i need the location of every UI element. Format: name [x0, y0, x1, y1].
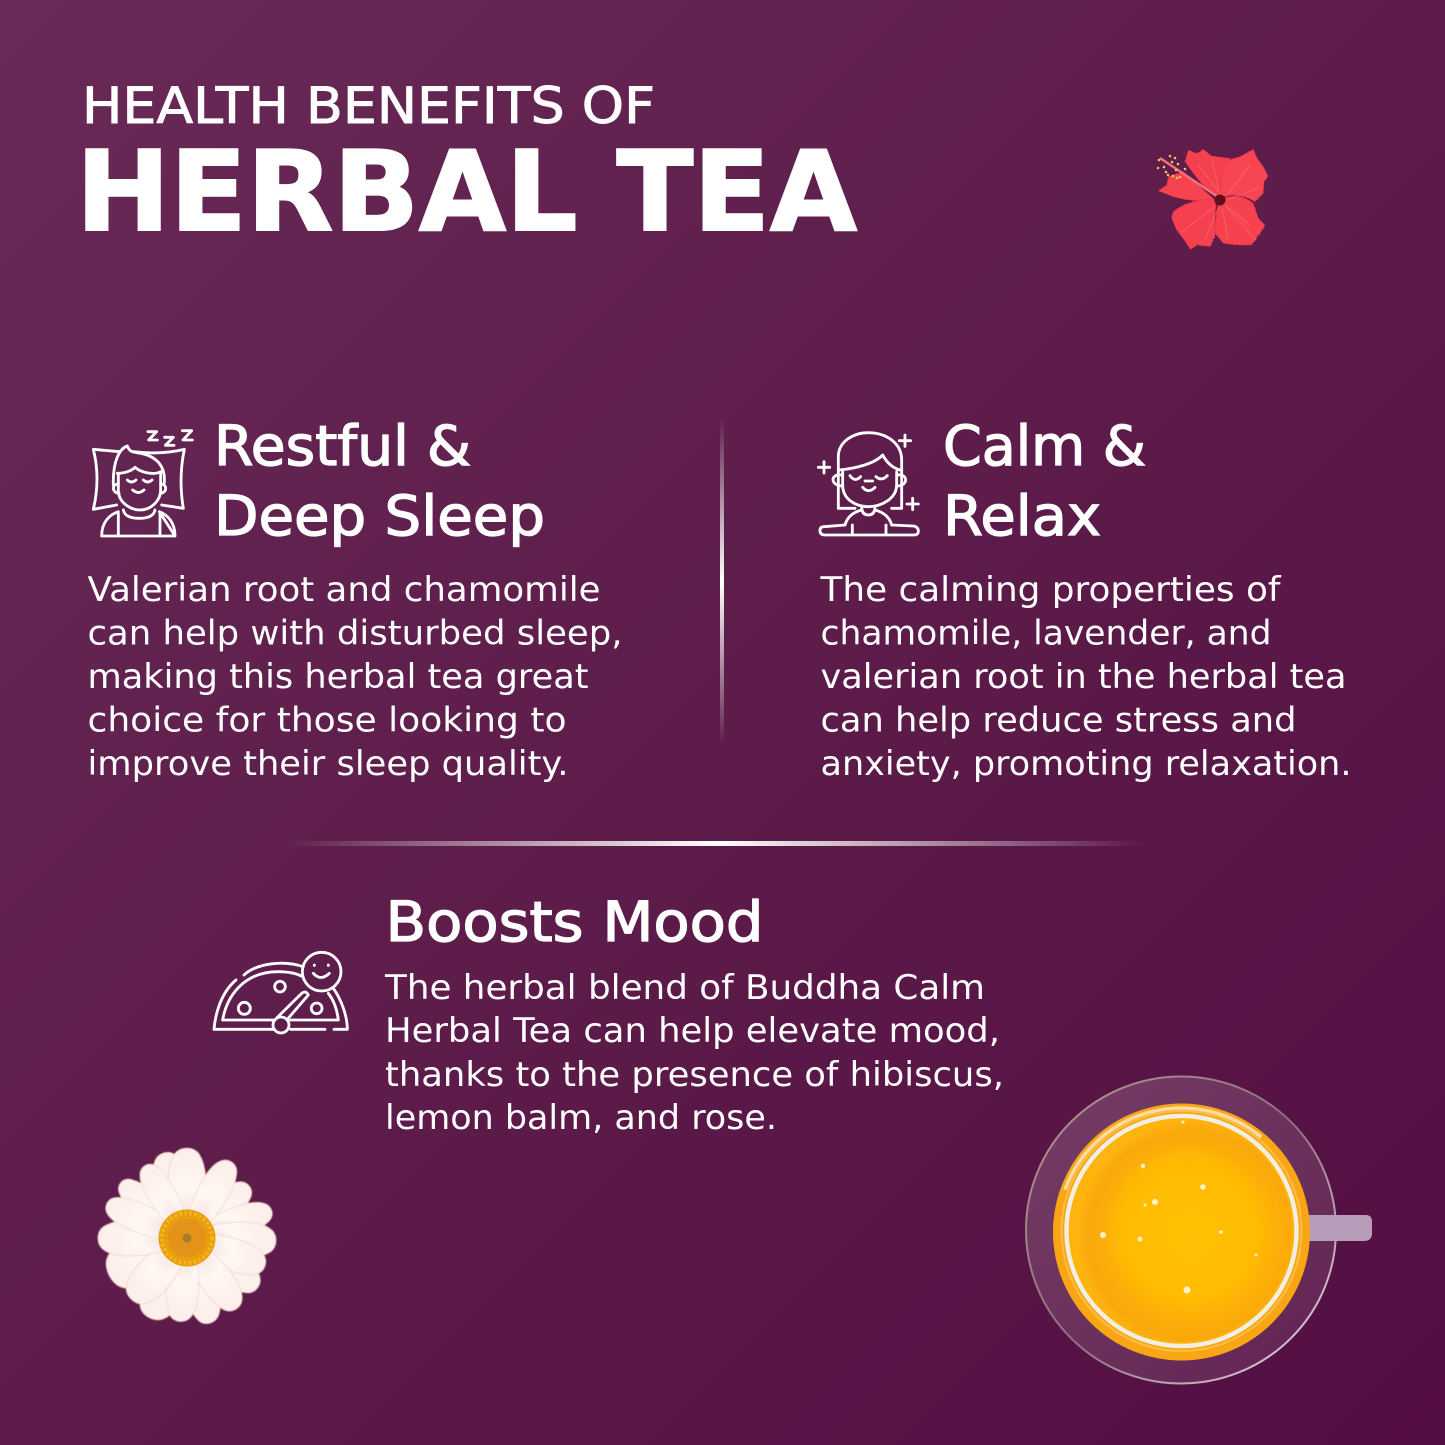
- icon: calm person: [818, 433, 918, 535]
- tea surface: [1070, 1120, 1292, 1342]
- title: HEALTH BENEFITS OF: [82, 77, 655, 135]
- panel: calm and relax: [818, 414, 1352, 783]
- text block: The herbal blend of Buddha Calm: [384, 968, 985, 1007]
- icon: sleeping person: [93, 431, 192, 536]
- vertical divider: [720, 418, 724, 746]
- text block: thanks to the presence of hibiscus,: [385, 1055, 1004, 1094]
- text block: choice for those looking to: [88, 700, 566, 740]
- text block: valerian root in the herbal tea: [820, 657, 1346, 696]
- text block: making this herbal tea great: [88, 657, 588, 696]
- panel: restful and deep sleep: [88, 414, 622, 783]
- text block: Herbal Tea can help elevate mood,: [385, 1011, 1000, 1050]
- bubbles: [1100, 1120, 1258, 1294]
- panel: boosts mood: [214, 890, 1004, 1137]
- heading: Boosts Mood: [386, 890, 764, 954]
- saucer: [1026, 1076, 1336, 1384]
- text block: chamomile, lavender, and: [820, 614, 1272, 652]
- heading: [214, 414, 545, 548]
- text block: [384, 968, 1004, 1137]
- heading: Restful &: [214, 414, 471, 478]
- heading: Deep Sleep: [214, 484, 545, 548]
- horizontal divider: [286, 841, 1146, 846]
- heading: Calm &: [943, 414, 1146, 478]
- text block: [819, 570, 1352, 783]
- text block: [88, 570, 622, 783]
- text block: lemon balm, and rose.: [385, 1098, 777, 1137]
- chamomile flower: [98, 1148, 277, 1327]
- heading: [943, 414, 1146, 548]
- text block: can help with disturbed sleep,: [88, 614, 622, 652]
- cup rim: [1053, 1104, 1310, 1360]
- tea cup: [1026, 1076, 1372, 1384]
- text block: improve their sleep quality.: [88, 744, 568, 783]
- heading: Relax: [943, 484, 1101, 548]
- text block: anxiety, promoting relaxation.: [820, 744, 1352, 783]
- text block: Valerian root and chamomile: [88, 570, 600, 609]
- text block: The calming properties of: [819, 570, 1282, 609]
- handle: [1308, 1215, 1372, 1241]
- text block: can help reduce stress and: [820, 700, 1296, 740]
- title: HERBAL TEA: [76, 128, 857, 257]
- icon: mood gauge: [214, 952, 347, 1033]
- white inner ring: [1066, 1116, 1296, 1346]
- hibiscus flower: [1157, 149, 1268, 249]
